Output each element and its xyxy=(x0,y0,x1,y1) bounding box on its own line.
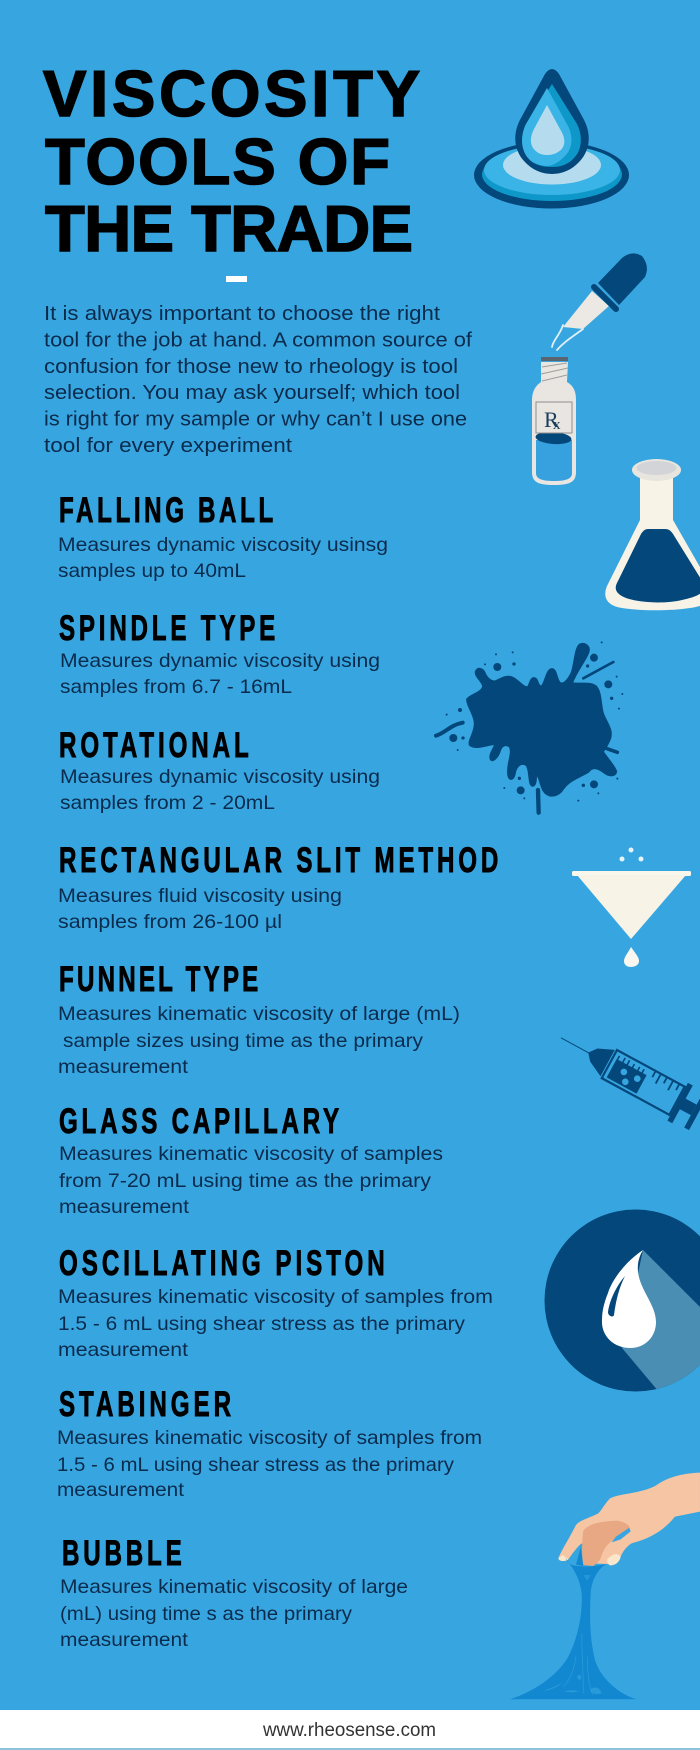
description: rotational: samples from 2 - 20mL xyxy=(60,792,275,814)
description: rectangular slit method xyxy=(58,885,342,933)
description: stabinger: Measures kinematic viscosity of samples from xyxy=(57,1427,482,1449)
description: spindle type: Measures dynamic viscosity using xyxy=(60,650,380,672)
section: funnel type xyxy=(58,961,460,1078)
description: rectangular slit method: Measures fluid viscosity using xyxy=(58,885,342,907)
title: VISCOSITY xyxy=(43,57,420,130)
heading: funnel type: FUNNEL TYPE xyxy=(59,961,258,999)
description: stabinger xyxy=(57,1427,482,1501)
intro paragraph: confusion for those new to rheology is tool xyxy=(44,356,458,378)
icon: funnel xyxy=(572,848,691,967)
description: spindle type xyxy=(60,650,380,698)
description: bubble: (mL) using time s as the primary xyxy=(60,1603,352,1625)
description: oscillating piston xyxy=(58,1286,493,1361)
section: rotational xyxy=(59,727,380,814)
intro paragraph: tool for the job at hand. A common source of xyxy=(44,330,472,352)
heading: spindle type: SPINDLE TYPE xyxy=(59,610,275,648)
description: bubble xyxy=(60,1576,408,1651)
heading: stabinger: STABINGER xyxy=(59,1386,231,1424)
icon: Rx bottle: x xyxy=(553,417,561,433)
intro paragraph: It is always important to choose the right xyxy=(44,303,440,325)
description: funnel type: sample sizes using time as the primary xyxy=(63,1030,423,1052)
heading: rotational: ROTATIONAL xyxy=(59,727,249,765)
footer bar xyxy=(0,1710,700,1750)
description: glass capillary: measurement xyxy=(59,1196,190,1218)
icon: Rx bottle xyxy=(532,357,576,485)
description: funnel type: measurement xyxy=(58,1056,189,1078)
section: bubble xyxy=(60,1535,408,1651)
icon: flask xyxy=(605,459,700,610)
section: spindle type xyxy=(59,610,380,698)
section: stabinger xyxy=(57,1386,482,1501)
description: stabinger: 1.5 - 6 mL using shear stress as the primary xyxy=(57,1454,454,1476)
title: TOOLS OF xyxy=(45,125,390,198)
description: falling ball: samples up to 40mL xyxy=(58,560,246,582)
icon: ink splat xyxy=(436,641,623,813)
heading: glass capillary: GLASS CAPILLARY xyxy=(59,1103,339,1141)
intro paragraph xyxy=(44,303,472,457)
heading: bubble: BUBBLE xyxy=(62,1535,182,1573)
heading: oscillating piston: OSCILLATING PISTON xyxy=(59,1245,385,1283)
icon: dropper xyxy=(552,253,647,350)
title xyxy=(43,57,420,265)
icon: Rx bottle: R xyxy=(544,407,559,432)
description: rotational xyxy=(60,766,380,814)
heading: rectangular slit method: RECTANGULAR SLIT METHOD xyxy=(59,842,498,880)
section: oscillating piston xyxy=(58,1245,493,1361)
title: THE TRADE xyxy=(45,192,413,265)
footer url: www.rheosense.com xyxy=(262,1720,436,1741)
section: glass capillary xyxy=(59,1103,443,1218)
description: oscillating piston: 1.5 - 6 mL using shear stress as the primary xyxy=(58,1313,465,1335)
description: falling ball: Measures dynamic viscosity usinsg xyxy=(58,534,388,556)
description: oscillating piston: Measures kinematic viscosity of samples from xyxy=(58,1286,493,1308)
heading: falling ball: FALLING BALL xyxy=(59,492,273,530)
description: bubble: Measures kinematic viscosity of large xyxy=(60,1576,408,1598)
description: bubble: measurement xyxy=(60,1629,189,1651)
section: rectangular slit method xyxy=(58,842,498,933)
description: oscillating piston: measurement xyxy=(58,1339,189,1361)
intro paragraph: is right for my sample or why can’t I use one xyxy=(44,408,467,430)
icon: water drop with ripple xyxy=(474,69,629,208)
icon: hand stretching slime xyxy=(510,1473,700,1699)
description: glass capillary: Measures kinematic viscosity of samples xyxy=(59,1143,443,1165)
section: falling ball xyxy=(58,492,388,582)
description: falling ball xyxy=(58,534,388,582)
description: rectangular slit method: samples from 26-100 µl xyxy=(58,911,282,933)
intro paragraph: tool for every experiment xyxy=(44,435,292,457)
icon: syringe xyxy=(551,1019,700,1132)
description: spindle type: samples from 6.7 - 16mL xyxy=(60,676,292,698)
description: funnel type: Measures kinematic viscosity of large (mL) xyxy=(58,1003,460,1025)
description: glass capillary xyxy=(59,1143,443,1218)
description: rotational: Measures dynamic viscosity using xyxy=(60,766,380,788)
intro paragraph: selection. You may ask yourself; which tool xyxy=(44,382,460,404)
title underline accent xyxy=(226,276,247,282)
description: glass capillary: from 7-20 mL using time as the primary xyxy=(59,1170,431,1192)
icon: milk drop on dark circle xyxy=(544,1210,700,1400)
description: funnel type xyxy=(58,1003,460,1078)
description: stabinger: measurement xyxy=(57,1479,185,1501)
